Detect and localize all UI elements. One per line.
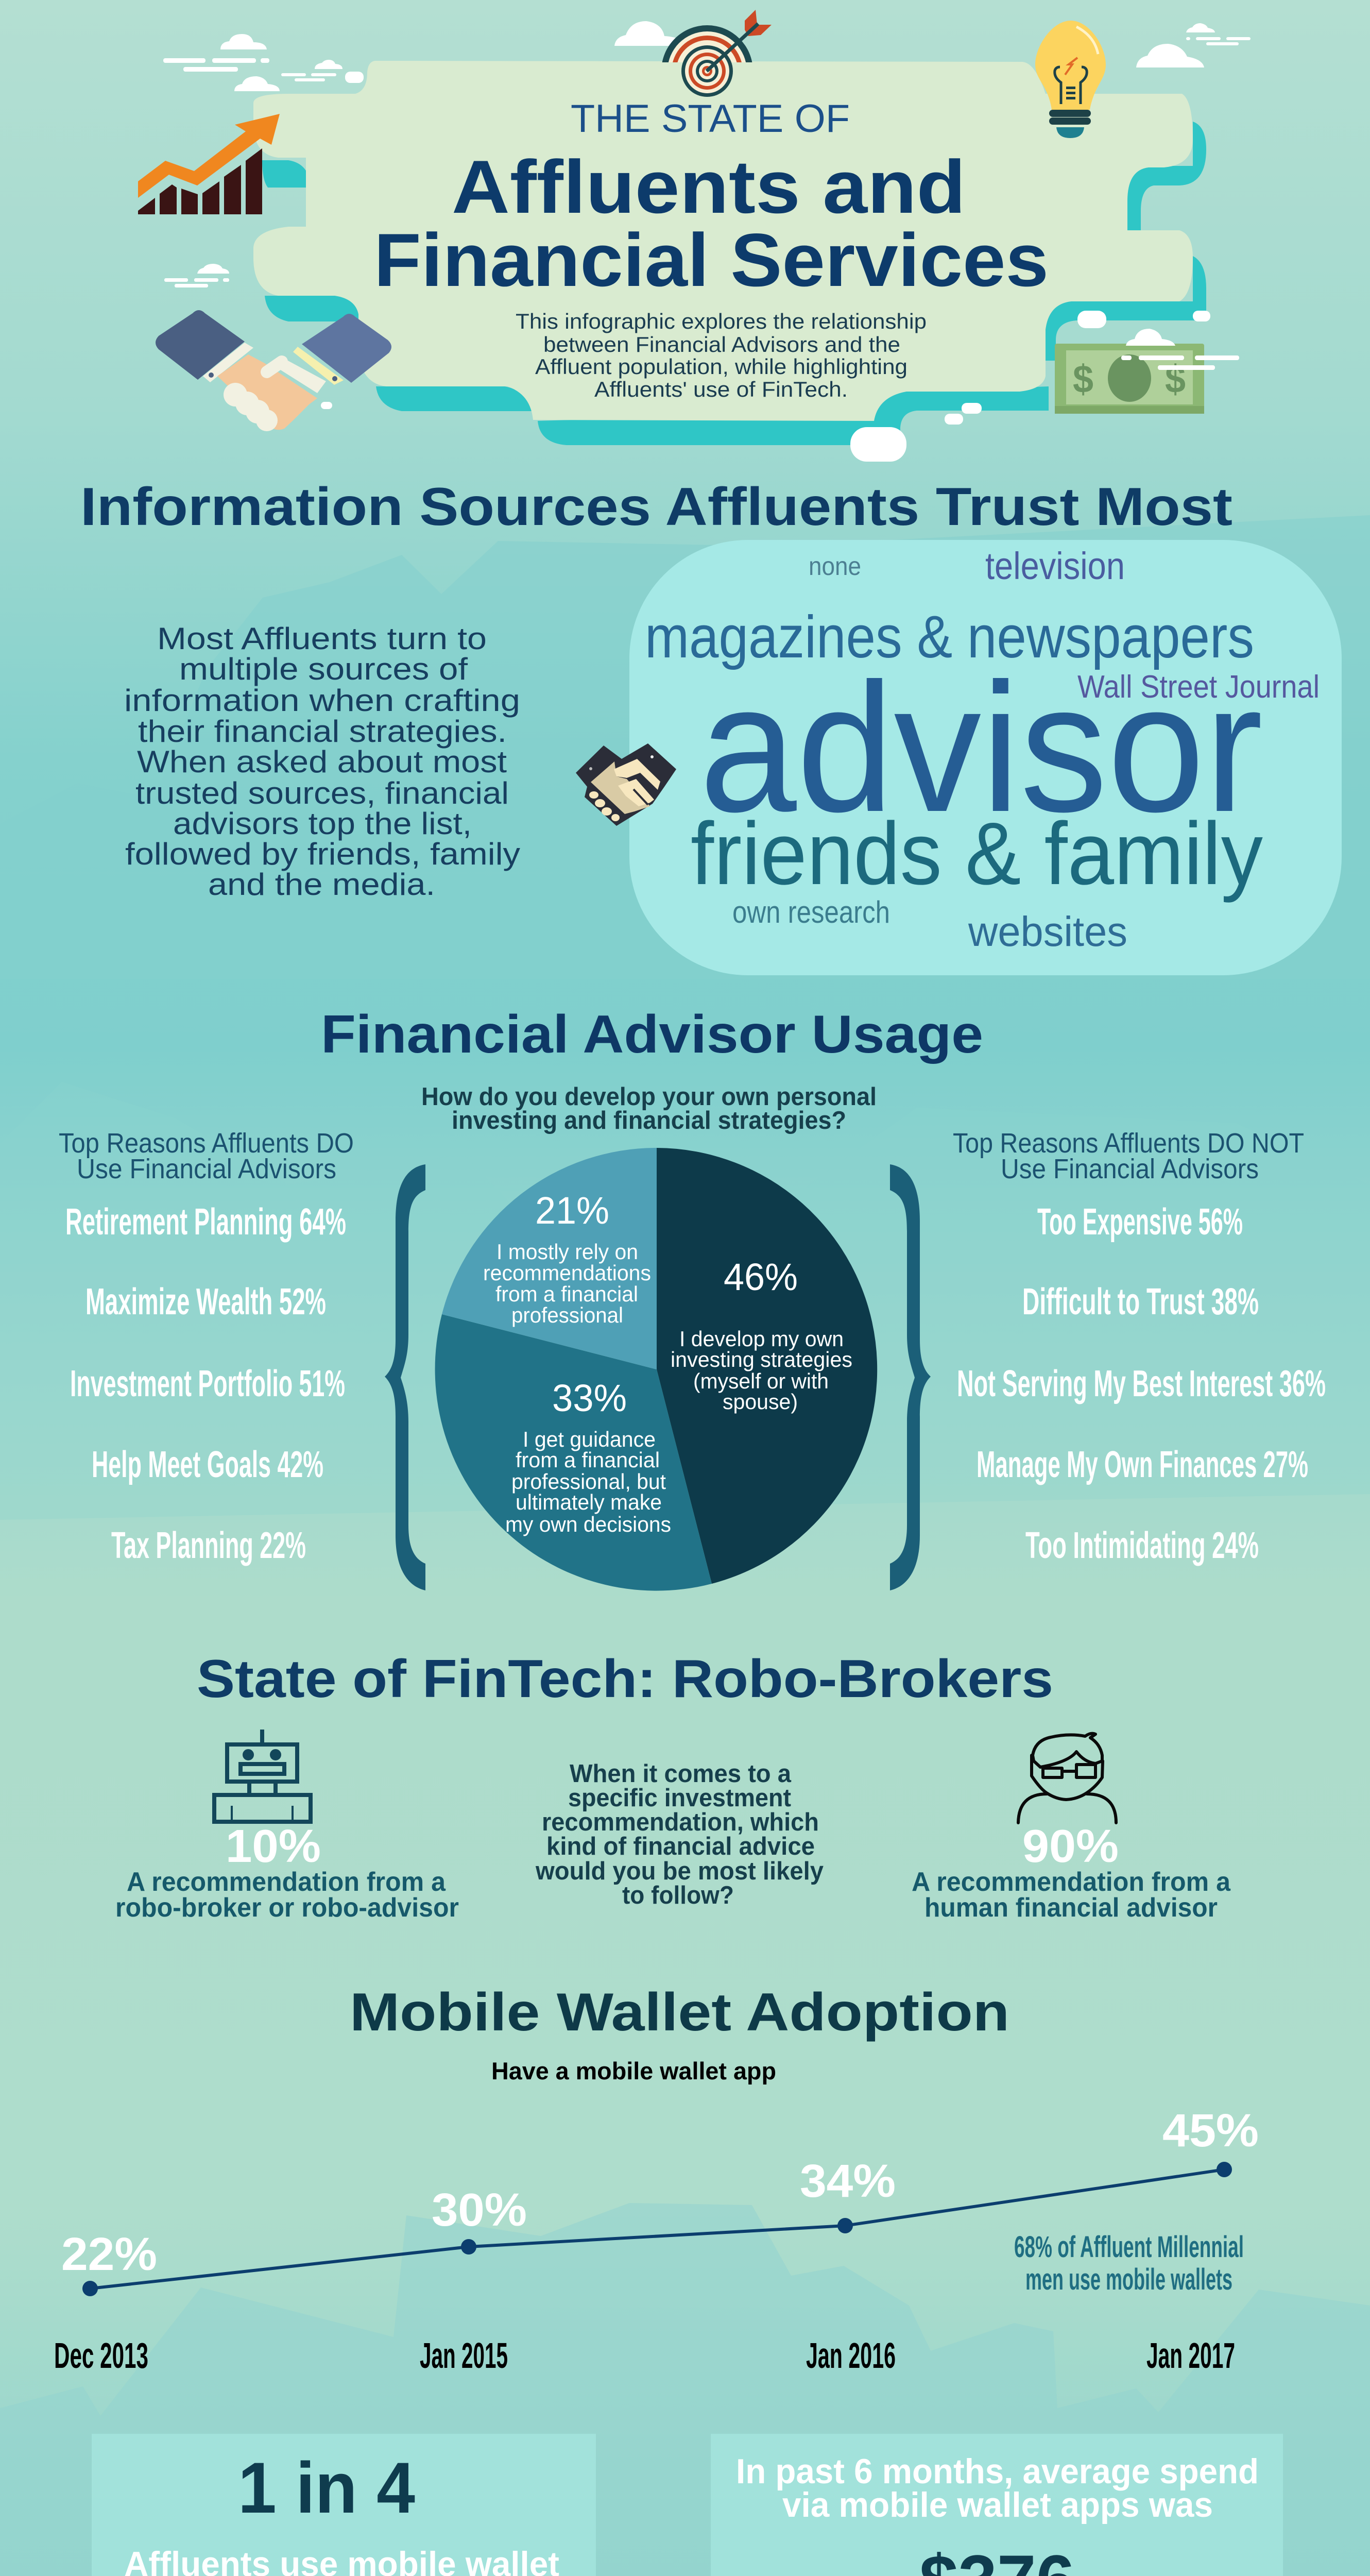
heading: financial advisor usage: Financial Advisor Usage xyxy=(321,1005,983,1064)
panel: word cloud: friends & family xyxy=(691,804,1263,903)
text block: intro description: Affluent population, while highlighting xyxy=(535,354,907,379)
panel: word cloud: Wall Street Journal xyxy=(1077,669,1320,705)
text block: trusted sources intro: followed by friends, family xyxy=(125,837,520,871)
stat: robo-broker 10 percent xyxy=(115,1821,459,1923)
icon: robot xyxy=(214,1730,311,1822)
line chart: mobile wallet adoption: 45% xyxy=(1162,2105,1259,2157)
stat: human advisor 90 percent: A recommendation from a xyxy=(912,1867,1231,1897)
stat: human advisor 90 percent: human financial advisor xyxy=(924,1893,1218,1923)
stat: human advisor 90 percent: 90% xyxy=(1022,1821,1119,1872)
label: 33 percent: from a financial xyxy=(516,1448,660,1472)
icon: small handshake xyxy=(576,743,676,826)
label: 21 percent: recommendations xyxy=(483,1261,651,1285)
text block: advice question: specific investment xyxy=(568,1784,791,1812)
text block: pie question: investing and financial strategies? xyxy=(452,1107,846,1134)
list: reasons affluents use advisors: Retirement Planning 64% xyxy=(65,1201,346,1243)
text block: advice question xyxy=(535,1760,824,1909)
panel: word cloud: television xyxy=(985,545,1125,587)
label: 21 percent: professional xyxy=(511,1303,623,1327)
slice: 46 percent own strategies xyxy=(657,1148,877,1584)
icon: clouds and dashes xyxy=(163,21,1251,462)
panel: 1 in 4 xyxy=(92,2434,596,2576)
text block: intro description: This infographic explores the relationship xyxy=(516,309,927,333)
text block: trusted sources intro: trusted sources, financial xyxy=(135,776,509,810)
icon: light bulb xyxy=(1035,21,1106,138)
label: 21 percent xyxy=(483,1189,651,1327)
icon: dollar bill: $ xyxy=(1073,358,1093,401)
label: 21 percent: I mostly rely on xyxy=(496,1240,638,1264)
text block: trusted sources intro xyxy=(124,621,520,902)
text block: trusted sources intro: their financial strategies. xyxy=(138,714,507,749)
label: 46 percent: (myself or with xyxy=(693,1369,829,1393)
icon: dollar bill: $ xyxy=(1165,358,1186,401)
label: 33 percent: professional, but xyxy=(511,1469,666,1494)
text block: reasons to use advisors heading xyxy=(59,1128,354,1184)
label: 21 percent: 21% xyxy=(535,1189,609,1232)
text block: advice question: kind of financial advice xyxy=(546,1833,815,1860)
text block: reasons not to use advisors heading xyxy=(953,1128,1304,1184)
text block: reasons to use advisors heading: Top Reasons Affluents DO xyxy=(59,1128,354,1159)
text block: trusted sources intro: and the media. xyxy=(208,867,435,902)
callout: millennial men: men use mobile wallets xyxy=(1025,2263,1232,2296)
label: 33 percent: I get guidance xyxy=(523,1427,656,1451)
list: reasons affluents use advisors: Investment Portfolio 51% xyxy=(70,1363,345,1404)
title: affluents and financial services: Financial Services xyxy=(374,218,1049,302)
icon: dollar bill xyxy=(1055,329,1239,414)
chart subtitle: Have a mobile wallet app xyxy=(491,2057,776,2084)
text block: trusted sources intro: When asked about most xyxy=(137,744,507,779)
text block: reasons not to use advisors heading: Use Financial Advisors xyxy=(1001,1154,1259,1184)
text block: advice question: recommendation, which xyxy=(542,1808,819,1836)
panel: average spend: In past 6 months, average spend xyxy=(736,2452,1259,2491)
pie chart xyxy=(435,1148,877,1591)
line chart: mobile wallet adoption: 30% xyxy=(432,2184,527,2236)
stat: robo-broker 10 percent: 10% xyxy=(226,1821,321,1872)
panel: word cloud xyxy=(629,540,1342,975)
label: 46 percent: investing strategies xyxy=(671,1347,852,1371)
callout: millennial men xyxy=(1014,2230,1244,2296)
text block: intro description xyxy=(516,309,927,401)
text block: reasons not to use advisors heading: Top Reasons Affluents DO NOT xyxy=(953,1128,1304,1159)
text block: pie question: How do you develop your own personal xyxy=(421,1083,877,1111)
line chart: mobile wallet adoption: 34% xyxy=(800,2156,896,2207)
list: reasons affluents use advisors: Help Meet Goals 42% xyxy=(92,1444,323,1485)
icon: growth chart xyxy=(138,114,280,214)
text block: trusted sources intro: Most Affluents turn to xyxy=(157,621,487,656)
title: the state of: THE STATE OF xyxy=(571,97,850,141)
list: reasons affluents use advisors: Maximize Wealth 52% xyxy=(85,1281,326,1323)
line chart: mobile wallet adoption: Jan 2016 xyxy=(806,2335,896,2376)
slice: 33 percent guidance xyxy=(435,1314,712,1591)
text block: trusted sources intro: multiple sources of xyxy=(179,652,468,686)
panel: word cloud: magazines & newspapers xyxy=(645,603,1254,670)
title: affluents and financial services: Affluents and xyxy=(452,145,966,229)
label: 46 percent xyxy=(671,1256,852,1414)
text block: advice question: would you be most likely xyxy=(535,1857,824,1885)
line chart: mobile wallet adoption: Dec 2013 xyxy=(54,2335,148,2376)
text block: advice question: to follow? xyxy=(622,1882,734,1909)
icon: large handshake xyxy=(156,310,391,431)
text block: intro description: Affluents' use of FinTech. xyxy=(594,377,848,401)
panel: word cloud: own research xyxy=(732,895,890,929)
label: 33 percent: ultimately make xyxy=(516,1490,662,1514)
icon: human advisor xyxy=(1018,1734,1116,1823)
label: 46 percent: 46% xyxy=(724,1256,798,1298)
line chart: mobile wallet adoption: Jan 2015 xyxy=(420,2335,508,2376)
panel: average spend xyxy=(711,2434,1283,2576)
heading: state of fintech: State of FinTech: Robo-Brokers xyxy=(197,1649,1053,1709)
label: 46 percent: I develop my own xyxy=(679,1327,844,1351)
text block: trusted sources intro: information when crafting xyxy=(124,683,520,718)
text block: advice question: When it comes to a xyxy=(570,1760,792,1788)
list: reasons affluents avoid advisors xyxy=(957,1201,1326,1566)
panel: word cloud: advisor xyxy=(699,646,1263,850)
panel: word cloud: websites xyxy=(968,908,1127,955)
label: 33 percent: my own decisions xyxy=(505,1512,671,1536)
text block: pie question xyxy=(421,1083,877,1134)
slice: 21 percent recommendations xyxy=(442,1148,657,1369)
label: 33 percent xyxy=(505,1377,671,1536)
icon: right brace xyxy=(890,1164,931,1590)
icon: left brace xyxy=(385,1164,425,1590)
text block: reasons to use advisors heading: Use Financial Advisors xyxy=(77,1154,336,1184)
panel: hero title banner xyxy=(253,61,1206,445)
line chart: mobile wallet adoption: Jan 2017 xyxy=(1146,2335,1235,2376)
label: 21 percent: from a financial xyxy=(495,1282,638,1306)
panel: word cloud: none xyxy=(809,552,861,581)
panel: 1 in 4: 1 in 4 xyxy=(238,2447,415,2528)
panel: average spend: via mobile wallet apps was xyxy=(782,2485,1213,2524)
line chart: mobile wallet adoption xyxy=(54,2105,1259,2376)
heading: mobile wallet adoption: Mobile Wallet Adoption xyxy=(350,1982,1009,2042)
text block: intro description: between Financial Advisors and the xyxy=(543,332,900,357)
callout: millennial men: 68% of Affluent Millennial xyxy=(1014,2230,1244,2264)
heading: information sources: Information Sources Affluents Trust Most xyxy=(80,477,1232,537)
text block: trusted sources intro: advisors top the list, xyxy=(173,806,472,841)
title: affluents and financial services xyxy=(374,145,1049,302)
label: 33 percent: 33% xyxy=(552,1377,627,1419)
stat: human advisor 90 percent xyxy=(912,1821,1231,1923)
stat: robo-broker 10 percent: A recommendation from a xyxy=(127,1867,446,1897)
icon: target with arrow xyxy=(662,10,772,97)
label: 46 percent: spouse) xyxy=(723,1389,798,1414)
line chart: mobile wallet adoption: 22% xyxy=(61,2229,157,2280)
list: reasons affluents use advisors: Tax Planning 22% xyxy=(111,1525,306,1566)
list: reasons affluents use advisors xyxy=(65,1201,346,1566)
stat: robo-broker 10 percent: robo-broker or robo-advisor xyxy=(115,1893,459,1923)
